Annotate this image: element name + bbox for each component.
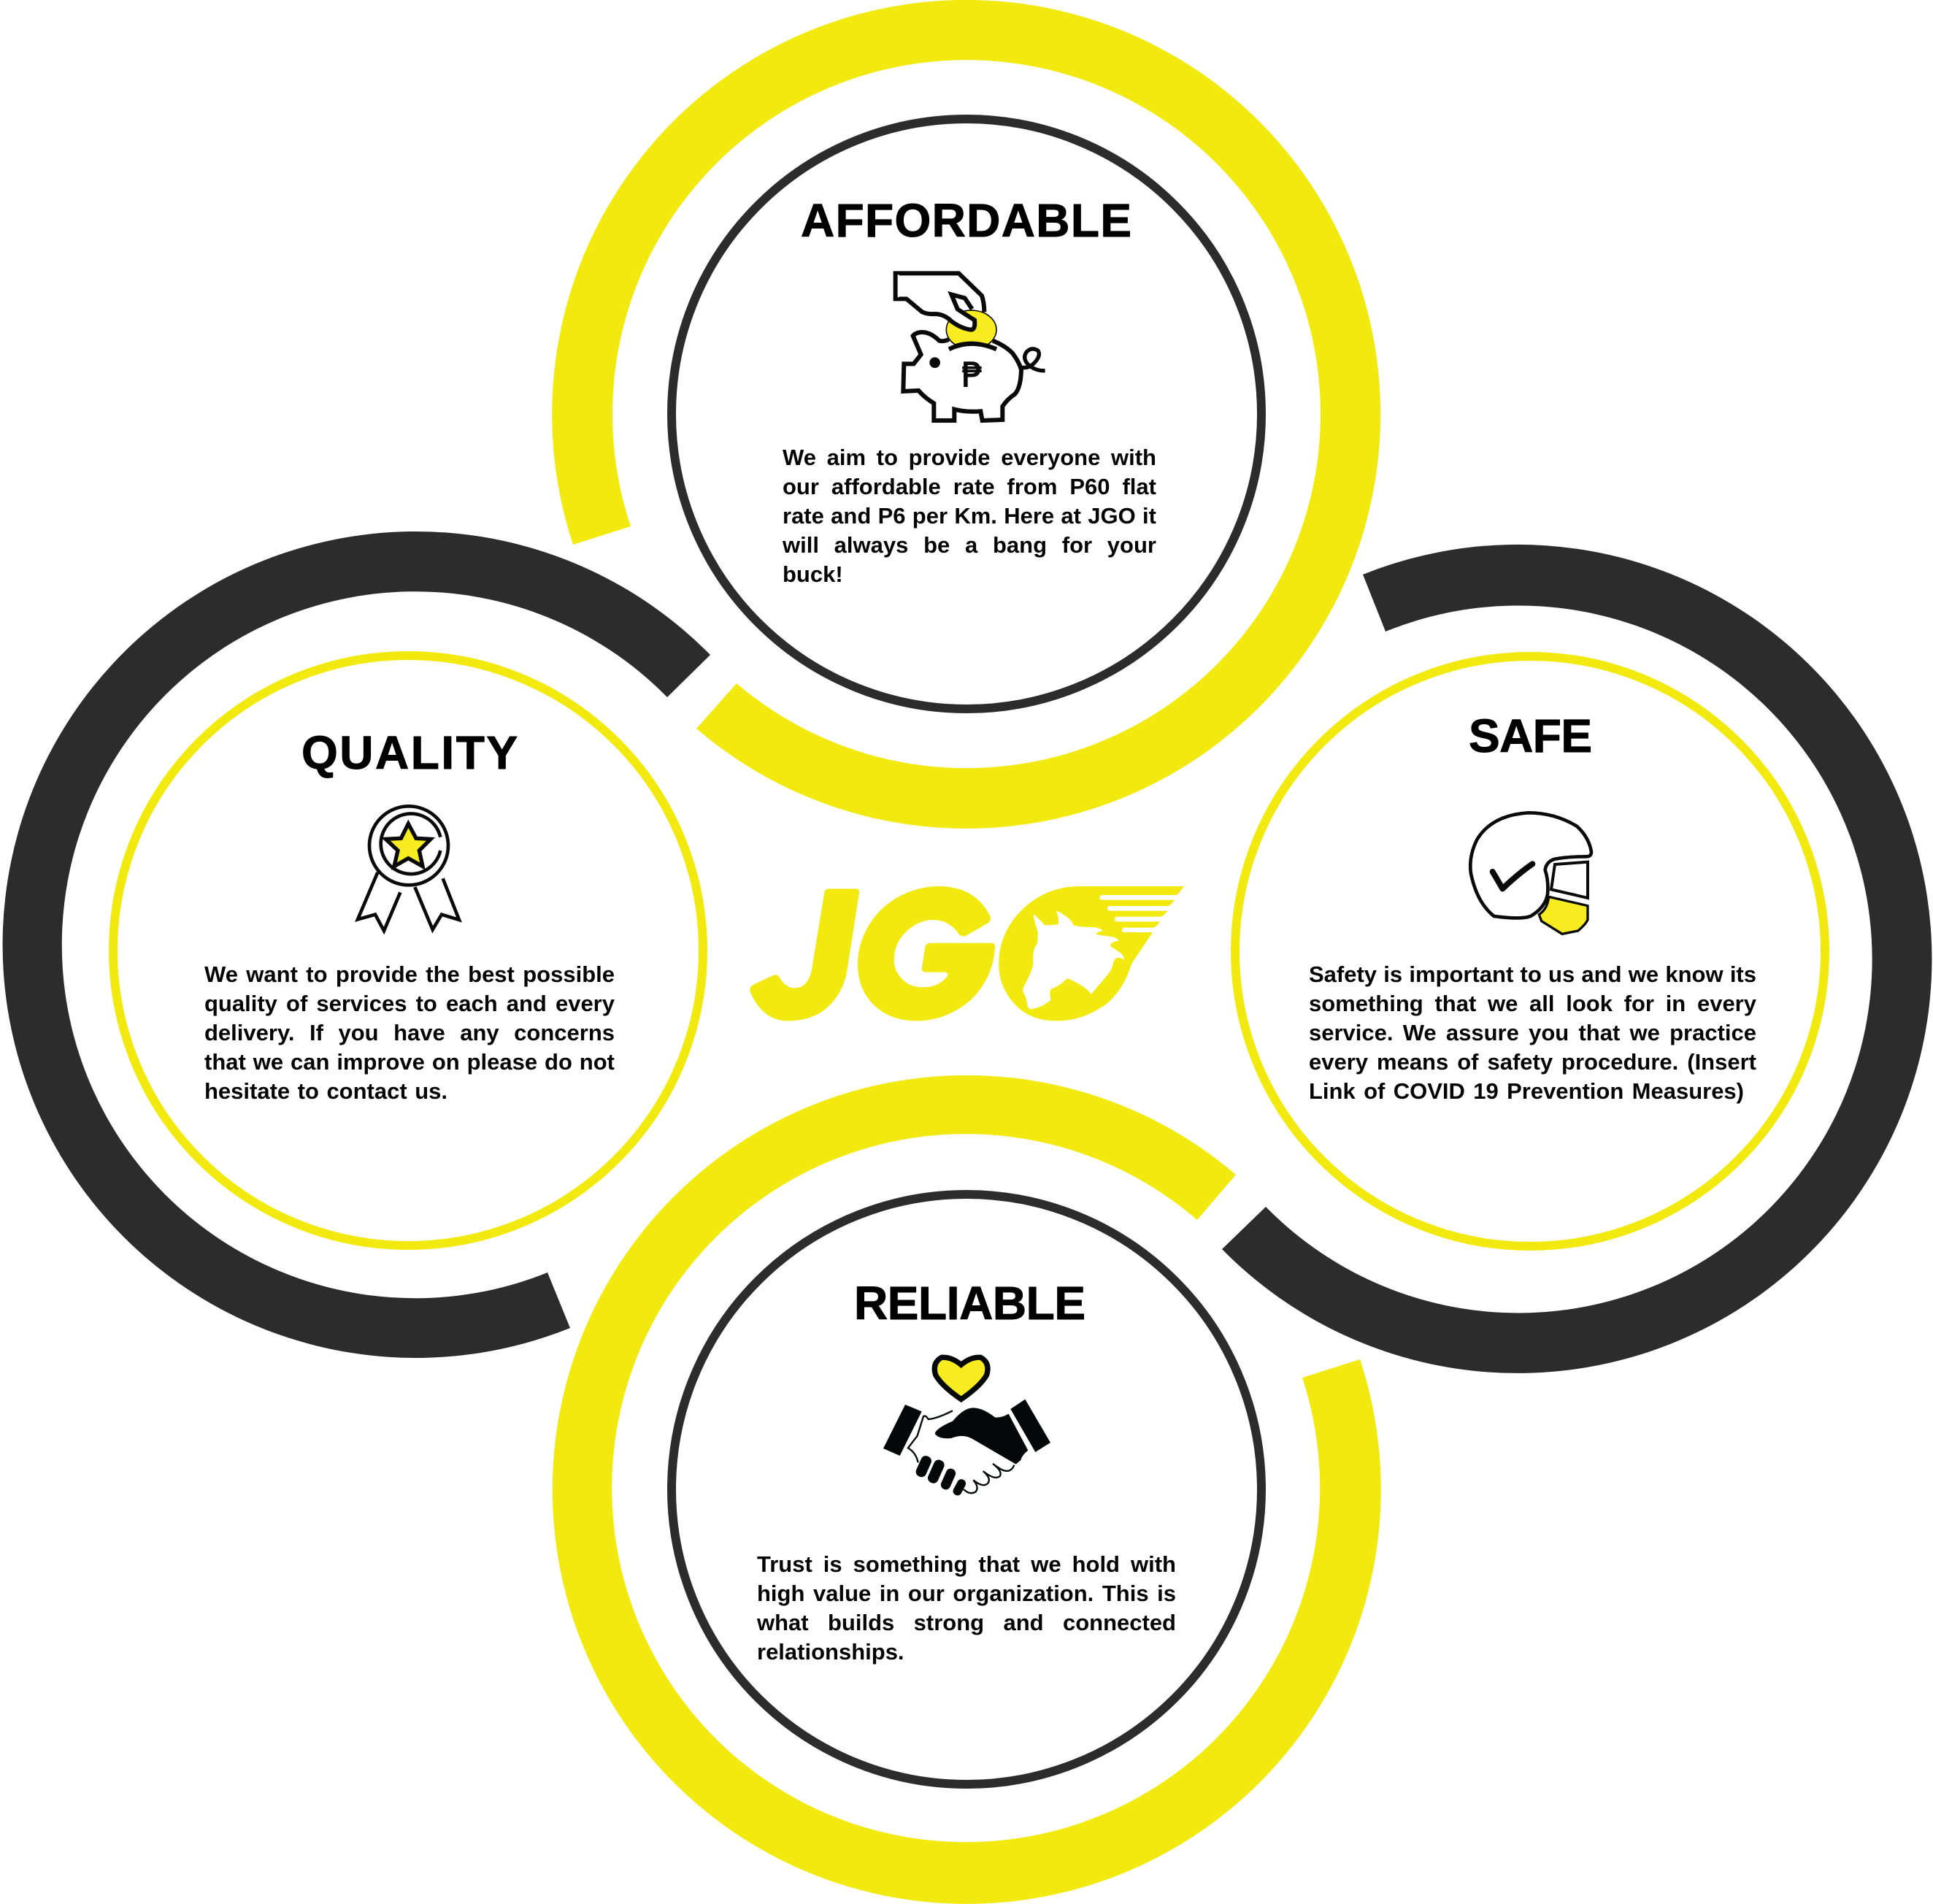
text block: affordable: buck! [783, 561, 843, 587]
text block: quality: quality of services to each and every [204, 991, 615, 1016]
icon: helmet with mask and check [1470, 813, 1591, 934]
dark inner circle [672, 119, 1261, 709]
text block: affordable: rate and P6 per Km. Here at JGO it [783, 503, 1156, 529]
icon: handshake with heart [883, 1357, 1050, 1497]
text block: affordable [783, 445, 1156, 587]
text block: reliable: high value in our organization. This is [757, 1581, 1176, 1606]
dark outer ring arc [1222, 545, 1932, 1373]
panel: affordable [552, 0, 1381, 829]
heading: reliable: RELIABLE [854, 1277, 1085, 1329]
text block: quality [204, 961, 615, 1104]
icon: award ribbon with star [358, 806, 459, 931]
center logo: JGO [750, 886, 1184, 1021]
text block: quality: that we can improve on please do not [204, 1049, 615, 1075]
dark inner circle [672, 1194, 1261, 1784]
heading: safe: SAFE [1469, 710, 1592, 762]
text block: safe: every means of safety procedure. (Insert [1309, 1049, 1756, 1075]
text block: reliable [756, 1551, 1176, 1665]
panel: safe [1222, 545, 1932, 1373]
yellow inner circle [113, 656, 703, 1245]
heading: affordable: AFFORDABLE [801, 194, 1131, 247]
text block: reliable: relationships. [757, 1639, 904, 1665]
yellow outer ring arc [552, 0, 1380, 829]
panel: reliable [552, 1075, 1381, 1904]
text block: safe: service. We assure you that we practice [1309, 1020, 1756, 1045]
text block: safe: something that we all look for in every [1309, 991, 1756, 1016]
panel: quality [3, 531, 710, 1358]
text block: safe [1309, 961, 1756, 1104]
text block: quality: We want to provide the best possible [204, 961, 615, 987]
text block: affordable: We aim to provide everyone with [783, 445, 1156, 470]
text block: reliable: Trust is something that we hold with [757, 1551, 1176, 1577]
text block: affordable: will always be a bang for your [783, 532, 1156, 558]
heading: quality: QUALITY [301, 726, 518, 779]
text block: reliable: what builds strong and connected [757, 1610, 1176, 1635]
text block: quality: delivery. If you have any concerns [204, 1020, 615, 1045]
dark outer ring arc [3, 531, 710, 1358]
yellow outer ring arc [553, 1075, 1381, 1904]
text block: quality: hesitate to contact us. [204, 1078, 447, 1104]
text block: affordable: our affordable rate from P60 flat [783, 474, 1156, 499]
text block: safe: Link of COVID 19 Prevention Measures) [1309, 1078, 1744, 1104]
icon: piggy bank with coin and hand [896, 273, 1045, 421]
text block: safe: Safety is important to us and we know its [1309, 961, 1756, 987]
icon: piggy bank with coin and hand: ₱ [961, 356, 983, 395]
yellow inner circle [1235, 656, 1825, 1246]
